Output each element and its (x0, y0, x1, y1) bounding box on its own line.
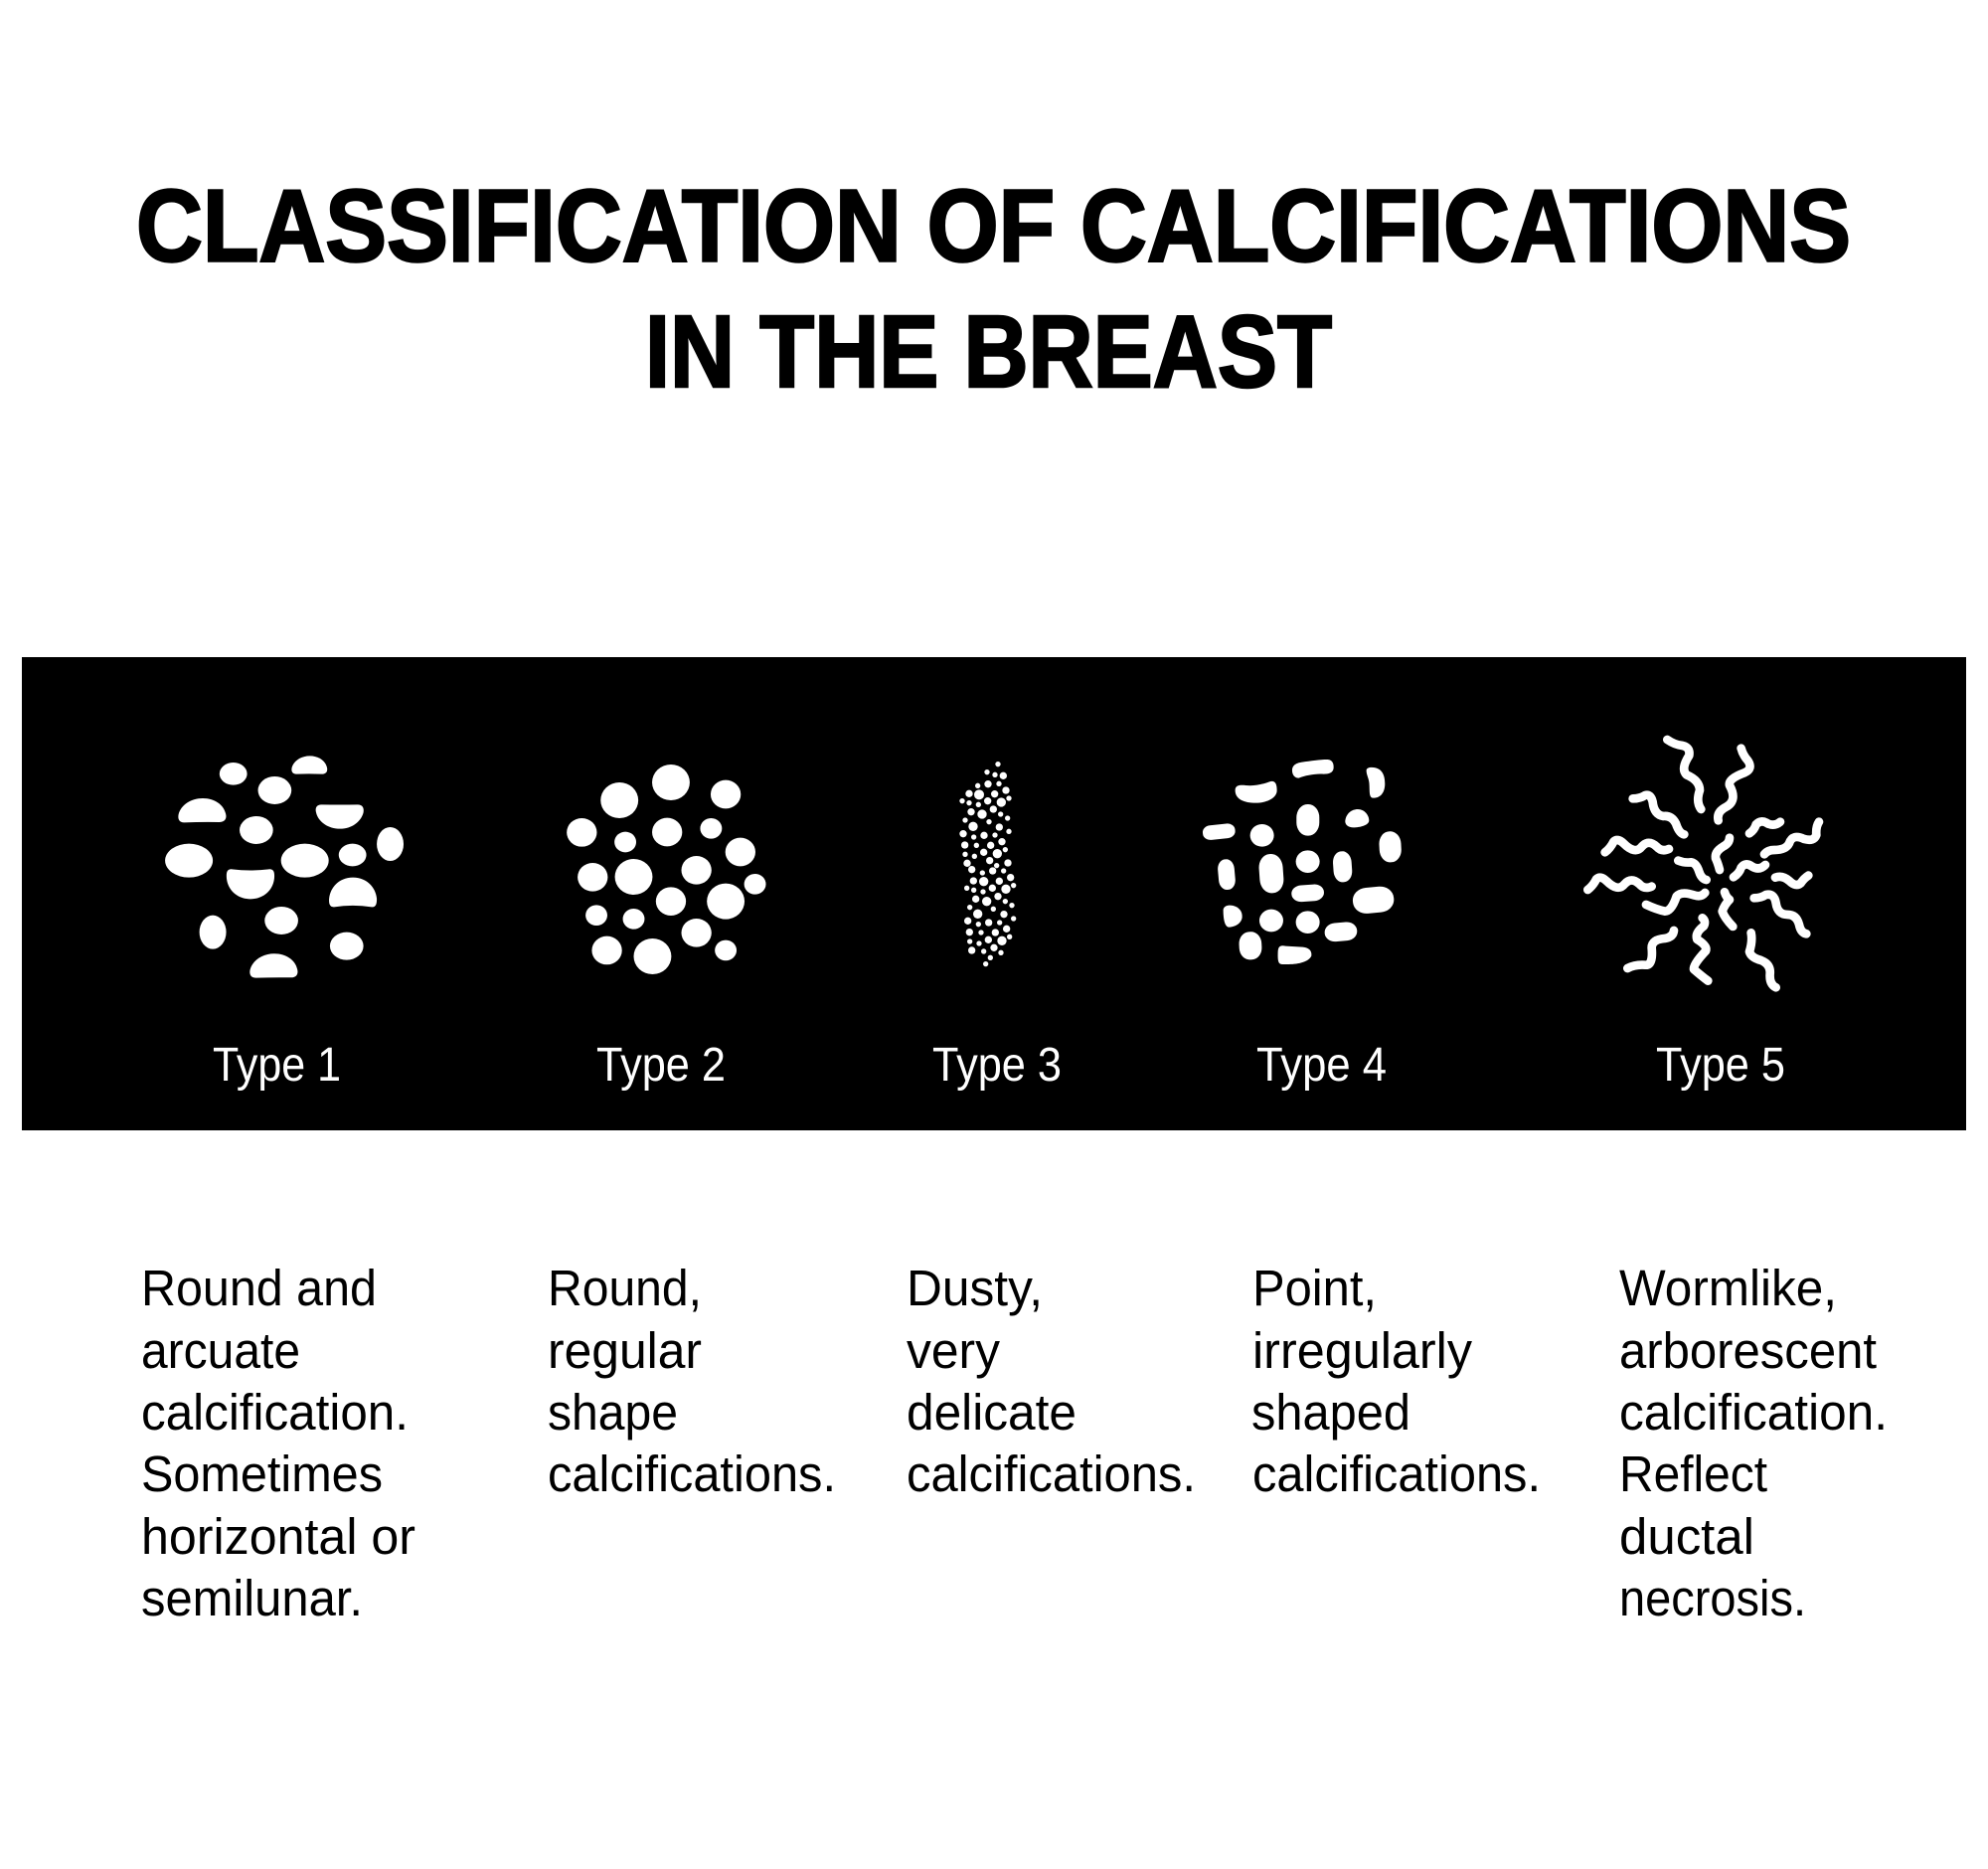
text block: type 2 description: regular (548, 1322, 702, 1379)
icon: type 1 round and arcuate calcifications (165, 756, 404, 978)
text block: type 1 description: arcuate (141, 1322, 300, 1379)
text block: type 5 description: Reflect (1619, 1445, 1767, 1502)
text block: type 3 description (907, 1260, 1196, 1502)
icon: type 5 wormlike arborescent calcifications (1587, 740, 1819, 987)
text block: type 5 description: Wormlike, (1619, 1260, 1837, 1316)
text block: type 4 description: irregularly (1252, 1322, 1472, 1379)
icon: type 2 round regular calcifications (567, 765, 766, 974)
text block: type 2 description: shape (548, 1384, 678, 1441)
title: CLASSIFICATION OF CALCIFICATIONS (136, 169, 1851, 282)
text block: type 3 description: calcifications. (907, 1445, 1196, 1502)
text block: type 5 description: necrosis. (1619, 1570, 1806, 1626)
panel: calcification types band (22, 657, 1966, 1130)
icon: type 4 point irregular calcifications (1202, 760, 1402, 964)
label: Type 2: Type 2 (596, 1039, 726, 1092)
text block: type 2 description (548, 1260, 836, 1502)
label: Type 3: Type 3 (932, 1039, 1062, 1092)
text block: type 4 description: Point, (1252, 1260, 1377, 1316)
text block: type 3 description: very (907, 1322, 1000, 1379)
text block: type 4 description: calcifications. (1252, 1445, 1541, 1502)
icon: type 3 dusty delicate calcifications (959, 762, 1016, 966)
label: Type 1: Type 1 (213, 1039, 341, 1092)
text block: type 3 description: delicate (907, 1384, 1077, 1441)
title (136, 169, 1851, 409)
text block: type 4 description: shaped (1251, 1384, 1410, 1441)
text block: type 5 description (1619, 1260, 1888, 1626)
text block: type 1 description: Sometimes (141, 1445, 383, 1502)
text block: type 5 description: arborescent (1619, 1322, 1877, 1379)
text block: type 4 description (1251, 1260, 1541, 1502)
text block: type 1 description (141, 1260, 415, 1626)
label: Type 4: Type 4 (1256, 1039, 1387, 1092)
text block: type 1 description: horizontal or (141, 1508, 415, 1565)
text block: type 5 description: calcification. (1619, 1384, 1888, 1441)
text block: type 1 description: semilunar. (141, 1570, 363, 1626)
text block: type 3 description: Dusty, (907, 1260, 1043, 1316)
text block: type 1 description: calcification. (141, 1384, 409, 1441)
title: IN THE BREAST (645, 294, 1332, 409)
text block: type 2 description: Round, (548, 1260, 702, 1316)
text block: type 2 description: calcifications. (548, 1445, 836, 1502)
text block: type 1 description: Round and (141, 1260, 377, 1316)
label: Type 5: Type 5 (1656, 1039, 1785, 1092)
text block: type 5 description: ductal (1619, 1508, 1754, 1565)
